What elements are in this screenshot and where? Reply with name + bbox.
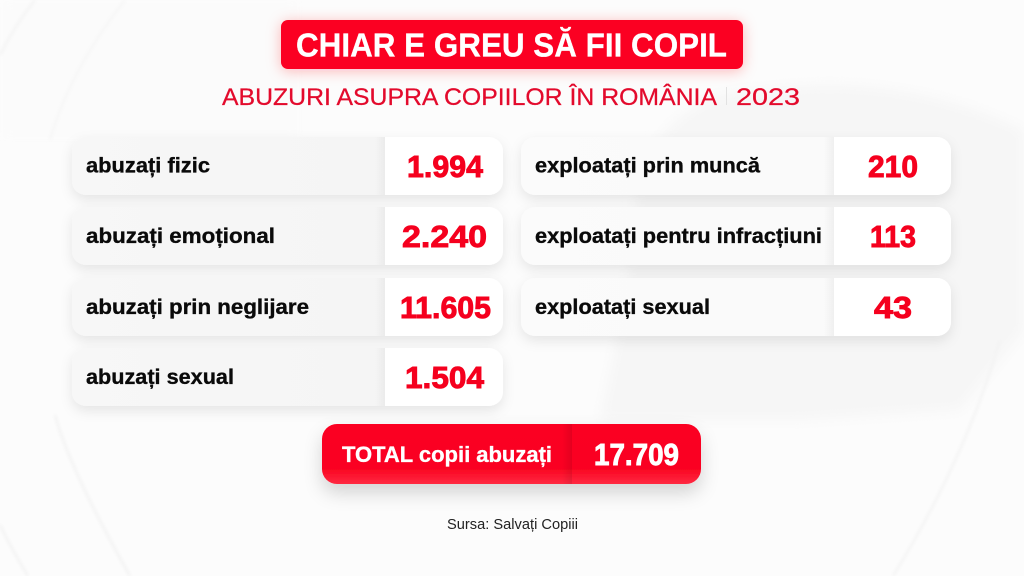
panel: abuzați fizic <box>72 137 503 195</box>
subtitle: 2023 <box>736 84 800 111</box>
panel: exploatați prin muncă: exploatați prin muncă <box>535 154 761 178</box>
panel: abuzați emoțional <box>72 207 503 265</box>
panel: abuzați sexual: 1.504 <box>405 360 485 395</box>
panel: abuzați fizic: abuzați fizic <box>86 154 210 178</box>
panel: exploatați prin muncă <box>521 137 951 195</box>
panel: total copii abuzați <box>322 424 701 484</box>
source note: Sursa: Salvați Copiii <box>447 517 578 533</box>
subtitle: ABUZURI ASUPRA COPIILOR ÎN ROMÂNIA <box>222 84 718 111</box>
panel: abuzați prin neglijare: abuzați prin neglijare <box>86 295 309 319</box>
panel: total copii abuzați: 17.709 <box>594 437 679 472</box>
panel: abuzați emoțional: abuzați emoțional <box>86 224 275 248</box>
panel: abuzați prin neglijare <box>72 278 503 336</box>
panel: exploatați sexual: 43 <box>874 290 912 325</box>
panel: abuzați emoțional: 2.240 <box>402 219 487 254</box>
panel: exploatați pentru infracțiuni: exploatați pentru infracțiuni <box>535 224 822 248</box>
panel: exploatați pentru infracțiuni <box>521 207 951 265</box>
panel: abuzați sexual: abuzați sexual <box>86 365 234 389</box>
panel: abuzați sexual <box>72 348 503 406</box>
title banner: CHIAR E GREU SĂ FII COPIL <box>296 26 727 64</box>
panel: total copii abuzați: TOTAL copii abuzați <box>342 442 552 467</box>
panel: exploatați pentru infracțiuni: 113 <box>870 219 916 254</box>
panel: exploatați sexual: exploatați sexual <box>535 295 710 319</box>
panel: abuzați prin neglijare: 11.605 <box>400 290 491 325</box>
panel: exploatați prin muncă: 210 <box>868 149 918 184</box>
panel: exploatați sexual <box>521 278 951 336</box>
panel: abuzați fizic: 1.994 <box>407 149 484 184</box>
